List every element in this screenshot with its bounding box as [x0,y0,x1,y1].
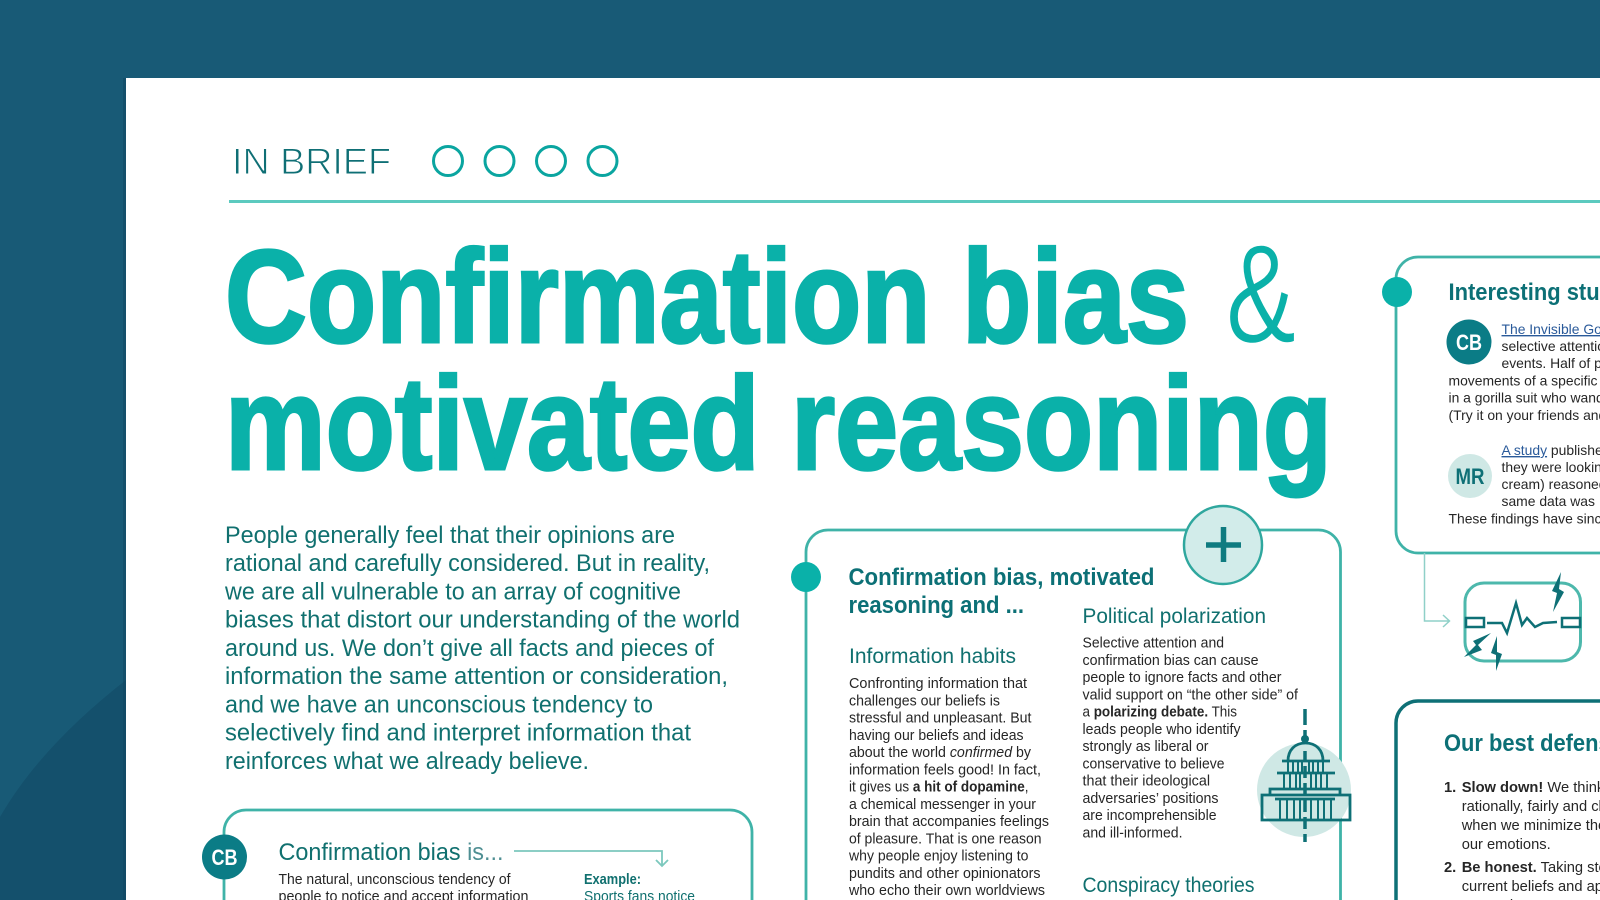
text block: invisible gorilla: movements of a specific [1448,372,1598,388]
column: information habits [848,645,1049,899]
arrow: to example [514,851,668,866]
icon: MR badge: MR [1456,464,1485,489]
column: information habits: why people enjoy listening to [848,848,1028,864]
text block: study: same data was [1502,493,1595,509]
column: information habits: a chemical messenger in your [849,797,1036,813]
intro text block: rational and carefully considered. But in reality, [225,550,710,577]
heading: reasoning and ... [848,592,1024,619]
column: political polarization: strongly as liberal or [1082,739,1209,755]
heading: confirmation bias is: Confirmation bias is... [278,839,504,866]
list: defenses [1444,780,1600,900]
text block: definition [278,872,528,900]
icon: CB badge [202,834,247,880]
arrow: connector to circuit icon [1424,553,1450,627]
column: political polarization: conservative to believe [1082,756,1224,772]
column: information habits: challenges our beliefs is [849,693,1000,709]
column: information habits: pundits and other opinionators [849,866,1040,882]
heading: Confirmation bias, motivated [848,564,1154,591]
column: political polarization: people to ignore facts and other [1082,670,1282,686]
list: defenses: 1. [1444,780,1456,796]
icon: short circuit [1464,572,1580,671]
column: information habits: of pleasure. That is one reason [849,831,1042,847]
column: political polarization: Selective attention and [1082,636,1224,652]
column: information habits: Confronting information that [849,676,1027,692]
title: & [1226,215,1296,372]
intro text block: selectively find and interpret information that [225,720,691,747]
title: motivated reasoning [225,350,1332,497]
intro text block: we are all vulnerable to an array of cognitive [224,578,681,606]
column: information habits: having our beliefs and ideas [849,728,1024,744]
column: information habits: brain that accompanies feelings [849,814,1049,830]
text block: invisible gorilla [1448,321,1600,423]
icon: CB badge: CB [1456,330,1482,355]
list: defenses: our emotions. [1462,837,1551,853]
icon: teal dot [791,562,821,592]
icon: CB badge [1446,320,1492,364]
icon: teal dot [1382,277,1412,307]
column: political polarization: adversaries’ positions [1082,791,1218,807]
column: political polarization: are incomprehensible [1082,808,1216,824]
icon: plus [1184,506,1262,584]
list: defenses: 2. [1444,860,1456,876]
column: political polarization: Political polarization [1082,605,1266,628]
column: information habits: it gives us a hit of dopamine, [849,780,1028,796]
heading: conspiracy theories: Conspiracy theories [1082,874,1254,897]
panel: confirmation bias is [202,810,752,900]
column: political polarization: that their ideological [1082,774,1210,790]
panel: interesting studies [1382,257,1600,553]
header: in brief: IN BRIEF [232,141,391,182]
intro text block: information the same attention or consideration, [225,663,728,690]
intro text block: reinforces what we already believe. [225,748,589,775]
title: Confirmation bias [225,223,1189,370]
panel: confirmation bias, motivated reasoning and [791,506,1351,900]
header: in brief [232,141,617,182]
intro text block: around us. We don’t give all facts and pieces of [225,635,714,662]
column: political polarization: a polarizing debate. This [1082,705,1237,721]
icon: CB badge: CB [212,845,238,870]
column: political polarization: leads people who identify [1082,722,1241,738]
text block: study [1448,442,1600,526]
intro text block: biases that distort our understanding of the world [225,607,740,634]
column: political polarization: valid support on “the other side” of [1082,687,1299,703]
text block: example [584,872,695,900]
column: political polarization [1082,605,1299,841]
column: information habits: information feels good! In fact, [849,762,1041,778]
column: political polarization: and ill-informed. [1082,825,1182,841]
column: information habits: about the world confirmed by [849,745,1032,761]
intro text block: and we have an unconscious tendency to [225,692,653,718]
panel: our best defenses [1396,701,1600,900]
column: political polarization: confirmation bias can cause [1082,653,1258,669]
column: information habits: stressful and unpleasant. But [849,710,1032,726]
column: information habits: Information habits [849,645,1016,668]
icon: MR badge [1448,454,1492,498]
title [225,215,1332,497]
text block: example: Example: [584,872,641,888]
column: information habits: who echo their own worldviews [848,883,1045,899]
intro text block [224,522,740,775]
text block: definition: The natural, unconscious tendency of [278,872,511,888]
icon: capitol building [1257,709,1351,842]
intro text block: People generally feel that their opinions are [225,522,675,549]
heading [848,564,1154,619]
icon: four circles [434,146,617,176]
